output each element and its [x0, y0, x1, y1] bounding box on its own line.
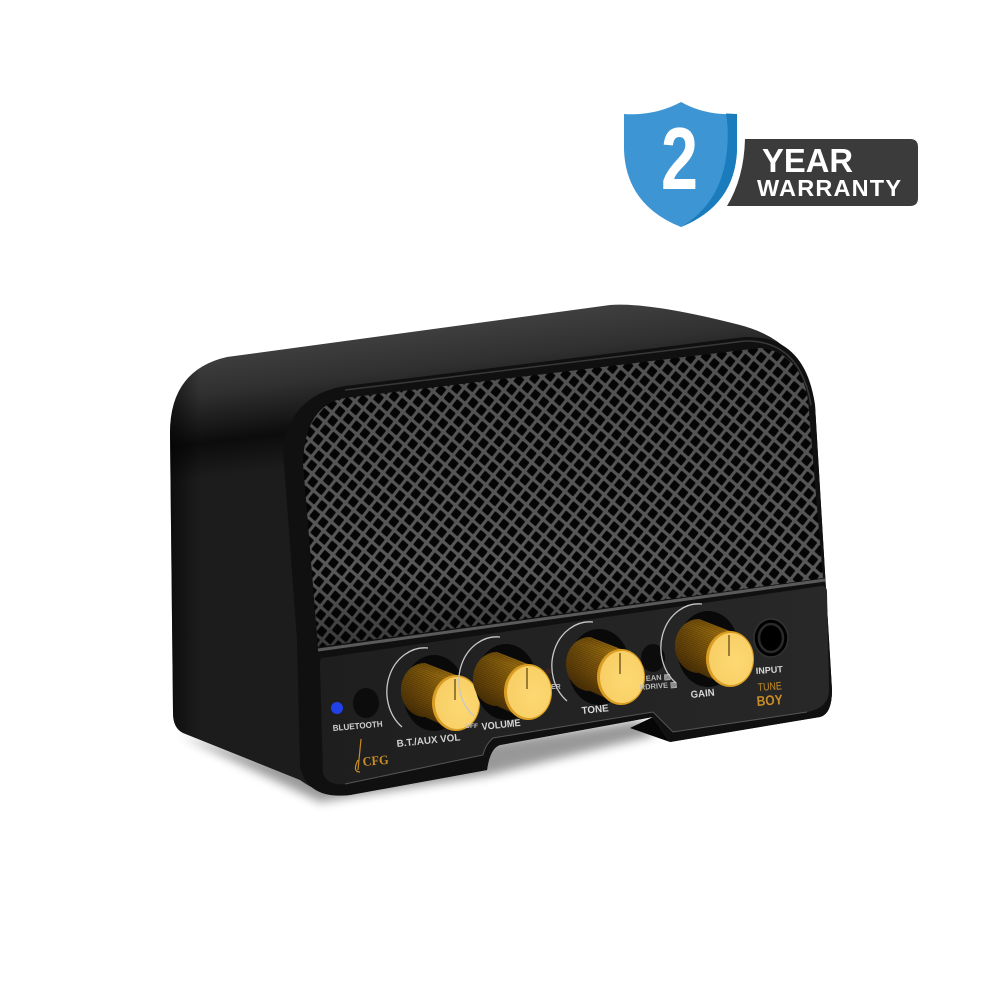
notch floor	[630, 717, 670, 742]
guitar amplifier	[170, 305, 832, 796]
tuneboy logo: TUNE	[757, 680, 782, 694]
cfg logo	[355, 739, 389, 772]
bt aux vol knob	[387, 648, 480, 731]
off label: OFF	[465, 723, 478, 730]
warranty word text: WARRANTY	[757, 175, 901, 201]
warranty label bar	[727, 139, 918, 206]
volume knob	[459, 637, 552, 720]
product shadow	[180, 720, 655, 802]
bluetooth led	[331, 702, 343, 714]
gain label: GAIN	[690, 688, 715, 701]
warranty year text: YEAR	[762, 142, 853, 179]
volume label: VOLUME	[481, 718, 521, 733]
grille trim	[318, 580, 825, 650]
speaker grille	[303, 348, 823, 647]
warranty badge	[624, 102, 918, 227]
input jack	[754, 619, 788, 657]
channel button	[641, 644, 665, 672]
bt aux vol label: B.T./AUX VOL	[396, 732, 461, 750]
channel labels: RDRIVE ▥	[639, 680, 678, 692]
input label: INPUT	[755, 664, 784, 676]
control panel	[320, 586, 829, 784]
bluetooth label: BLUETOOTH	[332, 719, 383, 733]
tuneboy logo	[756, 680, 784, 709]
tone knob	[552, 622, 645, 705]
front frame	[283, 337, 832, 796]
tone label: TONE	[581, 703, 609, 717]
warranty shield	[624, 102, 737, 227]
panel edge line	[345, 712, 807, 784]
power led label: ER	[551, 684, 561, 691]
bluetooth button	[353, 688, 379, 718]
shield number: 2	[661, 109, 698, 208]
power led label	[545, 668, 561, 691]
channel labels: EAN ▥	[645, 672, 671, 683]
cfg logo: CFG	[362, 752, 389, 769]
tuneboy logo: BOY	[756, 691, 784, 709]
channel labels	[639, 672, 678, 692]
amp body	[170, 305, 832, 795]
gain knob	[661, 604, 754, 687]
front frame highlight	[345, 341, 811, 405]
